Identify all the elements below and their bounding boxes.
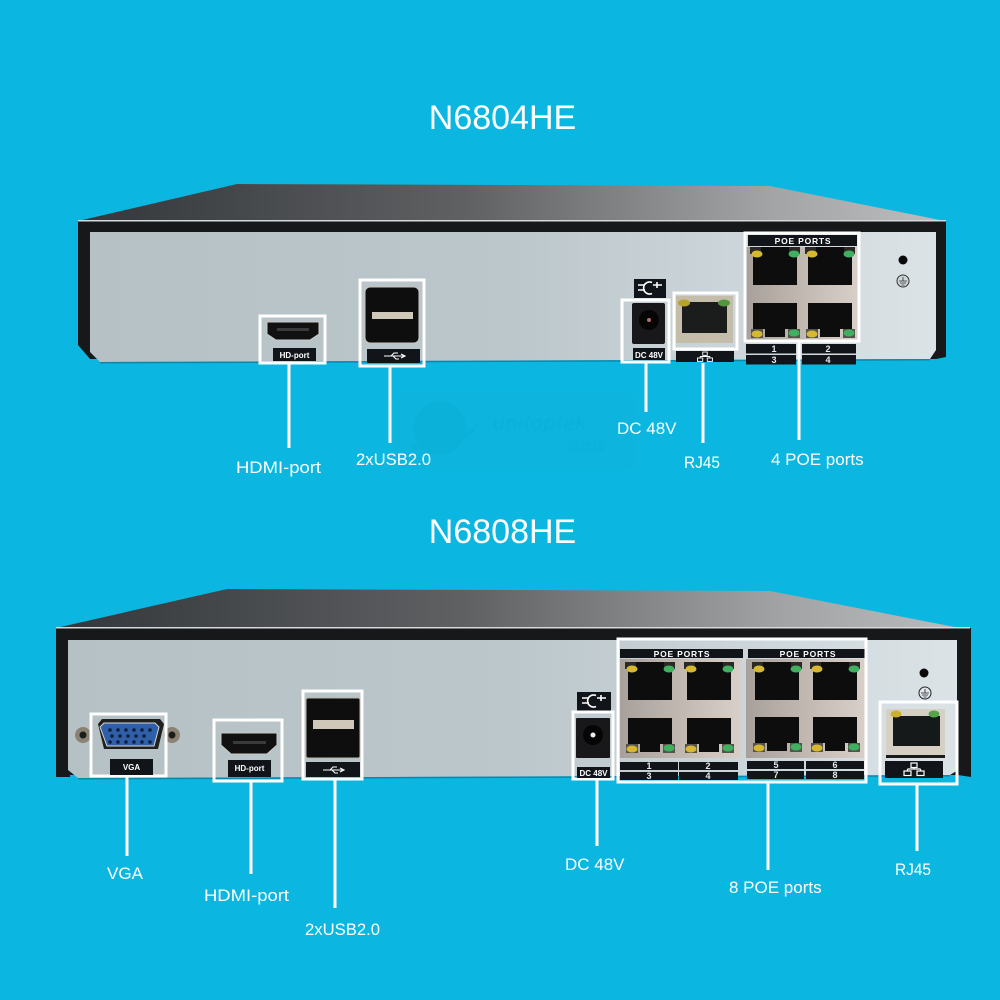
8 PoE ports block: 4	[705, 771, 711, 781]
8 PoE ports block	[618, 639, 866, 782]
labels: N6804HE	[236, 419, 864, 477]
8 PoE ports block: 1	[646, 761, 652, 771]
watermark	[394, 392, 644, 470]
chassis frame	[56, 628, 971, 777]
8 PoE ports block: 6	[832, 760, 838, 770]
top cover	[78, 184, 945, 221]
labels: N6808HE: HDMI-port	[204, 886, 289, 905]
RJ45 port	[880, 702, 957, 784]
labels: N6804HE: DC 48V	[617, 419, 677, 438]
8 PoE ports block: 7	[773, 770, 779, 780]
VGA port	[75, 714, 180, 776]
4 PoE ports block	[745, 233, 859, 365]
labels: N6808HE: 8 POE ports	[729, 878, 822, 897]
4 PoE ports block: 4	[825, 355, 831, 365]
grounding screw	[897, 256, 909, 287]
title: N6804HE: N6804HE	[429, 99, 576, 137]
labels: N6808HE: DC 48V	[565, 855, 625, 874]
USB port	[303, 691, 362, 779]
labels: N6808HE: 2xUSB2.0	[305, 920, 380, 939]
watermark: 联优科	[568, 439, 604, 454]
watermark: unitoptek	[492, 412, 588, 435]
grounding screw	[919, 668, 931, 699]
top cover	[56, 589, 970, 630]
labels: N6804HE: 4 POE ports	[771, 450, 864, 469]
rear panel	[90, 232, 936, 362]
device: N6808HE rear	[56, 589, 971, 784]
panel bottom shadow	[100, 359, 930, 364]
labels: N6804HE: RJ45	[684, 453, 720, 472]
DC 48V jack	[573, 692, 613, 779]
VGA port: VGA	[123, 763, 140, 772]
8 PoE ports block: POE PORTS	[654, 649, 710, 659]
labels: N6808HE: RJ45	[895, 860, 931, 879]
device: N6804HE rear	[78, 184, 946, 366]
4 PoE ports block: 2	[825, 344, 831, 354]
8 PoE ports block: 3	[646, 771, 652, 781]
HDMI port	[214, 720, 282, 781]
labels: N6804HE: 2xUSB2.0	[356, 450, 431, 469]
labels: N6804HE: HDMI-port	[236, 458, 321, 477]
callout lines: N6804HE	[289, 342, 799, 448]
8 PoE ports block: 8	[832, 770, 838, 780]
HDMI port	[260, 316, 325, 363]
labels: N6808HE	[107, 855, 931, 939]
DC 48V jack: DC 48V	[635, 351, 664, 360]
4 PoE ports block: POE PORTS	[775, 236, 831, 246]
8 PoE ports block: 5	[773, 760, 779, 770]
USB port	[360, 280, 424, 366]
labels: N6808HE: VGA	[107, 864, 144, 883]
HDMI port: HD-port	[280, 351, 310, 360]
8 PoE ports block: 2	[705, 761, 711, 771]
RJ45 port	[674, 293, 737, 362]
HDMI port: HD-port	[235, 764, 265, 773]
title: N6808HE: N6808HE	[429, 513, 576, 551]
4 PoE ports block: 3	[771, 355, 777, 365]
8 PoE ports block: POE PORTS	[780, 649, 836, 659]
panel bottom shadow	[78, 775, 950, 780]
4 PoE ports block: 1	[771, 344, 777, 354]
DC 48V jack: DC 48V	[579, 769, 608, 778]
rear panel	[68, 640, 958, 778]
DC 48V jack	[622, 279, 669, 362]
callout lines: N6808HE	[127, 777, 917, 908]
chassis frame	[78, 220, 946, 359]
